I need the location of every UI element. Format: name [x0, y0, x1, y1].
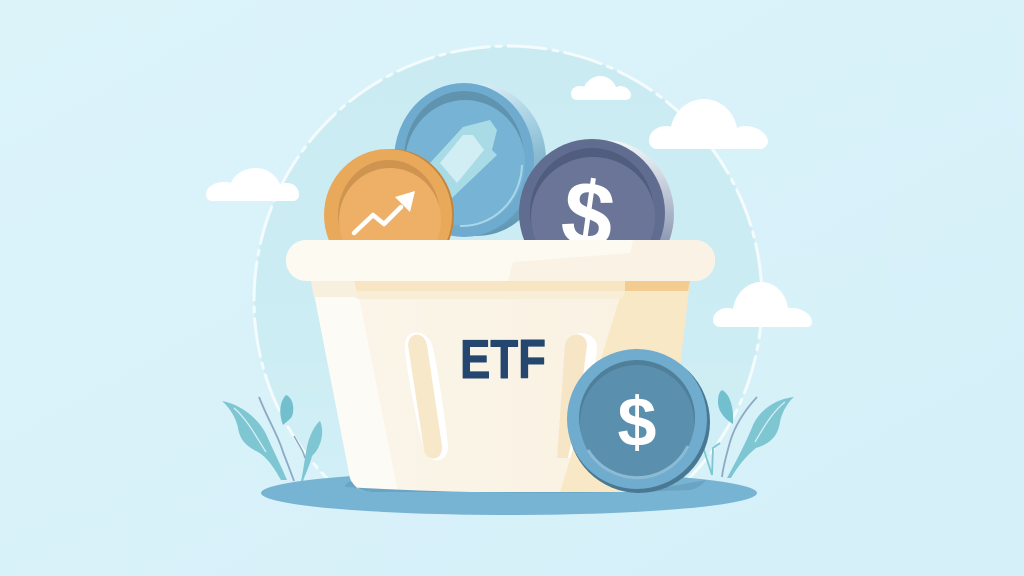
coin: blue rocket [394, 83, 546, 237]
basket body [311, 278, 690, 492]
cloud: top small [571, 76, 631, 100]
rim [286, 240, 715, 281]
basket [286, 240, 730, 492]
coin: navy dollar [519, 139, 674, 240]
left highlight [311, 278, 398, 492]
dollar sign: $ [618, 383, 656, 461]
ground shadow [261, 471, 757, 515]
slot: left [405, 333, 448, 460]
dollar sign: $ [556, 161, 620, 269]
basket label: ETF [460, 328, 546, 390]
cloud: right lower [713, 282, 812, 327]
icon: growth arrow [354, 207, 401, 233]
dashed circle outline [252, 44, 763, 478]
illustration: ETF basket with coins [206, 44, 812, 515]
coin: orange growth [324, 149, 454, 281]
background circle [254, 46, 760, 454]
cloud: left [206, 168, 299, 201]
slot: right [557, 333, 597, 458]
coin: front dollar [567, 349, 710, 493]
cloud: top right large [649, 99, 768, 149]
plant: left [222, 395, 322, 481]
right shade panel [560, 281, 690, 492]
plant: right [703, 390, 794, 478]
inner shadow on ground [345, 480, 706, 493]
icon: rocket [430, 120, 497, 198]
band under rim [354, 281, 690, 291]
